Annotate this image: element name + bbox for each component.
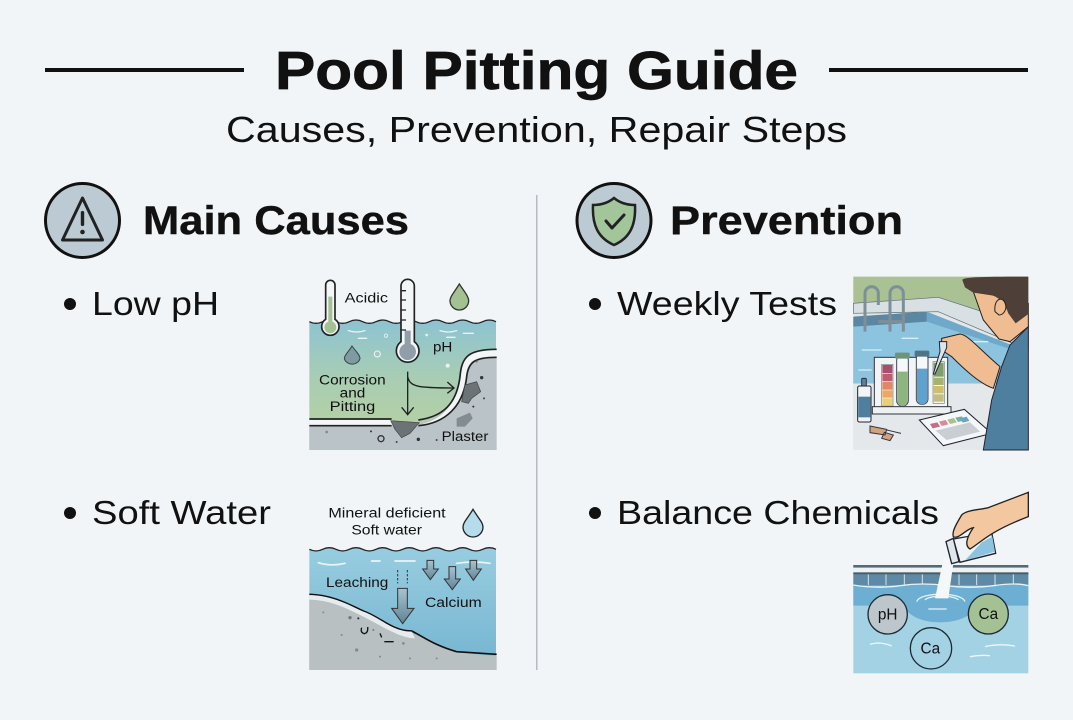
powder stream bbox=[935, 557, 953, 598]
panel: prevention bbox=[577, 184, 1028, 673]
illustration: balance chemicals bbox=[853, 492, 1028, 673]
colour chart card bbox=[919, 409, 992, 446]
icon: warning bbox=[46, 184, 120, 258]
icon: large thermometer bbox=[396, 279, 419, 362]
chemical circle: Ca blue: Ca bbox=[921, 640, 941, 657]
arrows: acid attack bbox=[402, 372, 454, 415]
chemical circle: Ca green: Ca bbox=[979, 606, 999, 623]
label: corrosion and pitting bbox=[319, 372, 386, 414]
panel: main causes bbox=[46, 184, 497, 670]
bullet: low pH: Low pH bbox=[92, 286, 219, 323]
icon: shield bbox=[577, 184, 651, 258]
hand pouring jar bbox=[946, 492, 1028, 564]
icon: grey drop bbox=[344, 346, 360, 364]
test rack bbox=[872, 351, 951, 414]
label: corrosion and pitting: Corrosion bbox=[319, 372, 386, 387]
arrow: leaching bbox=[392, 570, 414, 624]
label: corrosion and pitting: Pitting bbox=[330, 399, 375, 414]
chemical circle: Ca green bbox=[968, 594, 1008, 634]
label: plaster: Plaster bbox=[442, 429, 489, 444]
chemical circle: pH bbox=[868, 595, 907, 634]
title rule left bbox=[45, 68, 244, 72]
bullet: balance chemicals: Balance Chemicals bbox=[617, 495, 939, 532]
title: Pool Pitting Guide bbox=[275, 41, 798, 101]
label: mineral deficient soft water: Mineral deficient bbox=[328, 506, 446, 521]
icon: small thermometer bbox=[322, 280, 339, 335]
illustration: weekly tests bbox=[853, 277, 1028, 450]
illustration: low pH corrosion bbox=[309, 279, 497, 450]
centre divider bbox=[536, 195, 538, 670]
heading: prevention: Prevention bbox=[670, 199, 903, 243]
person bbox=[933, 277, 1028, 450]
title rule right bbox=[829, 68, 1028, 72]
icon: green drop bbox=[450, 284, 469, 310]
label: mineral deficient soft water: Soft water bbox=[351, 522, 423, 537]
test tool bbox=[870, 426, 901, 441]
label: pH: pH bbox=[433, 340, 452, 355]
subtitle: Causes, Prevention, Repair Steps bbox=[226, 109, 847, 150]
chemical circle: pH: pH bbox=[878, 607, 897, 624]
label: leaching: Leaching bbox=[326, 575, 388, 590]
dropper bottle bbox=[858, 378, 871, 422]
illustration: soft water leaching bbox=[309, 506, 497, 670]
label: calcium: Calcium bbox=[425, 595, 482, 610]
bullet: weekly tests: Weekly Tests bbox=[617, 286, 837, 323]
label: acidic: Acidic bbox=[345, 290, 388, 305]
arrows: calcium bbox=[423, 560, 481, 590]
bullet: soft water: Soft Water bbox=[92, 495, 271, 532]
heading: main causes: Main Causes bbox=[143, 199, 409, 243]
icon: water drop bbox=[463, 509, 483, 537]
label: corrosion and pitting: and bbox=[340, 386, 365, 401]
label: mineral deficient soft water bbox=[328, 506, 446, 537]
chemical circle: Ca blue bbox=[910, 628, 952, 669]
